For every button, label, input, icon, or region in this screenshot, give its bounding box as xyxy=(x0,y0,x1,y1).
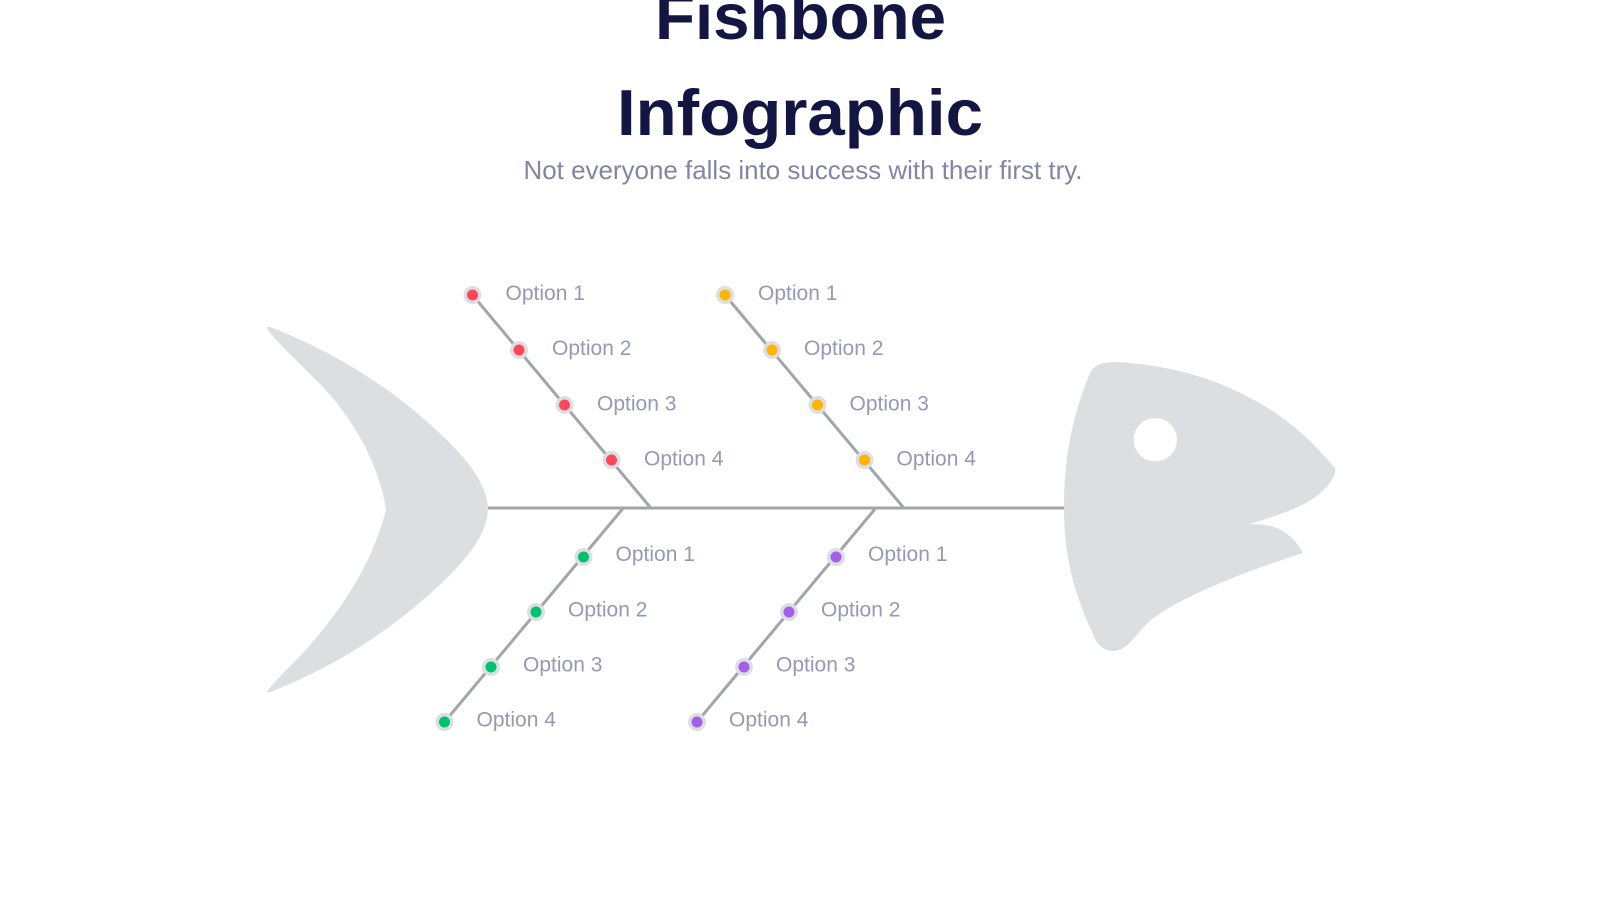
branch: purple options: Option 4 xyxy=(729,708,809,732)
icon: fish eye xyxy=(1134,418,1177,461)
branch: green options: Option 1 xyxy=(616,543,695,566)
branch: purple options xyxy=(688,509,947,732)
icon: fish tail xyxy=(267,327,488,693)
branch: red options: Option 3 xyxy=(597,392,676,416)
subtitle: Not everyone falls into success with their first try. xyxy=(524,155,1082,185)
branch: green options xyxy=(436,509,695,732)
branch: green options: Option 2 xyxy=(568,598,647,622)
branch: yellow options: Option 3 xyxy=(850,392,929,416)
branch: green options: Option 4 xyxy=(476,708,556,732)
icon: fish head xyxy=(1064,362,1335,651)
branch: yellow options xyxy=(716,282,976,507)
branch: purple options: Option 3 xyxy=(776,654,855,676)
spine line xyxy=(488,506,1066,510)
branch: red options xyxy=(464,282,724,507)
branch: red options: Option 2 xyxy=(552,337,631,360)
branch: purple options: Option 1 xyxy=(868,543,947,566)
branch: green options: Option 3 xyxy=(523,654,602,676)
branch: yellow options: Option 4 xyxy=(896,448,976,470)
branch: yellow options: Option 1 xyxy=(758,282,837,305)
title xyxy=(617,0,983,149)
branch: red options: Option 4 xyxy=(644,448,724,470)
title: Infographic xyxy=(617,76,983,149)
branch: purple options: Option 2 xyxy=(821,598,900,622)
branch: yellow options: Option 2 xyxy=(804,337,883,360)
branch: red options: Option 1 xyxy=(506,282,585,305)
